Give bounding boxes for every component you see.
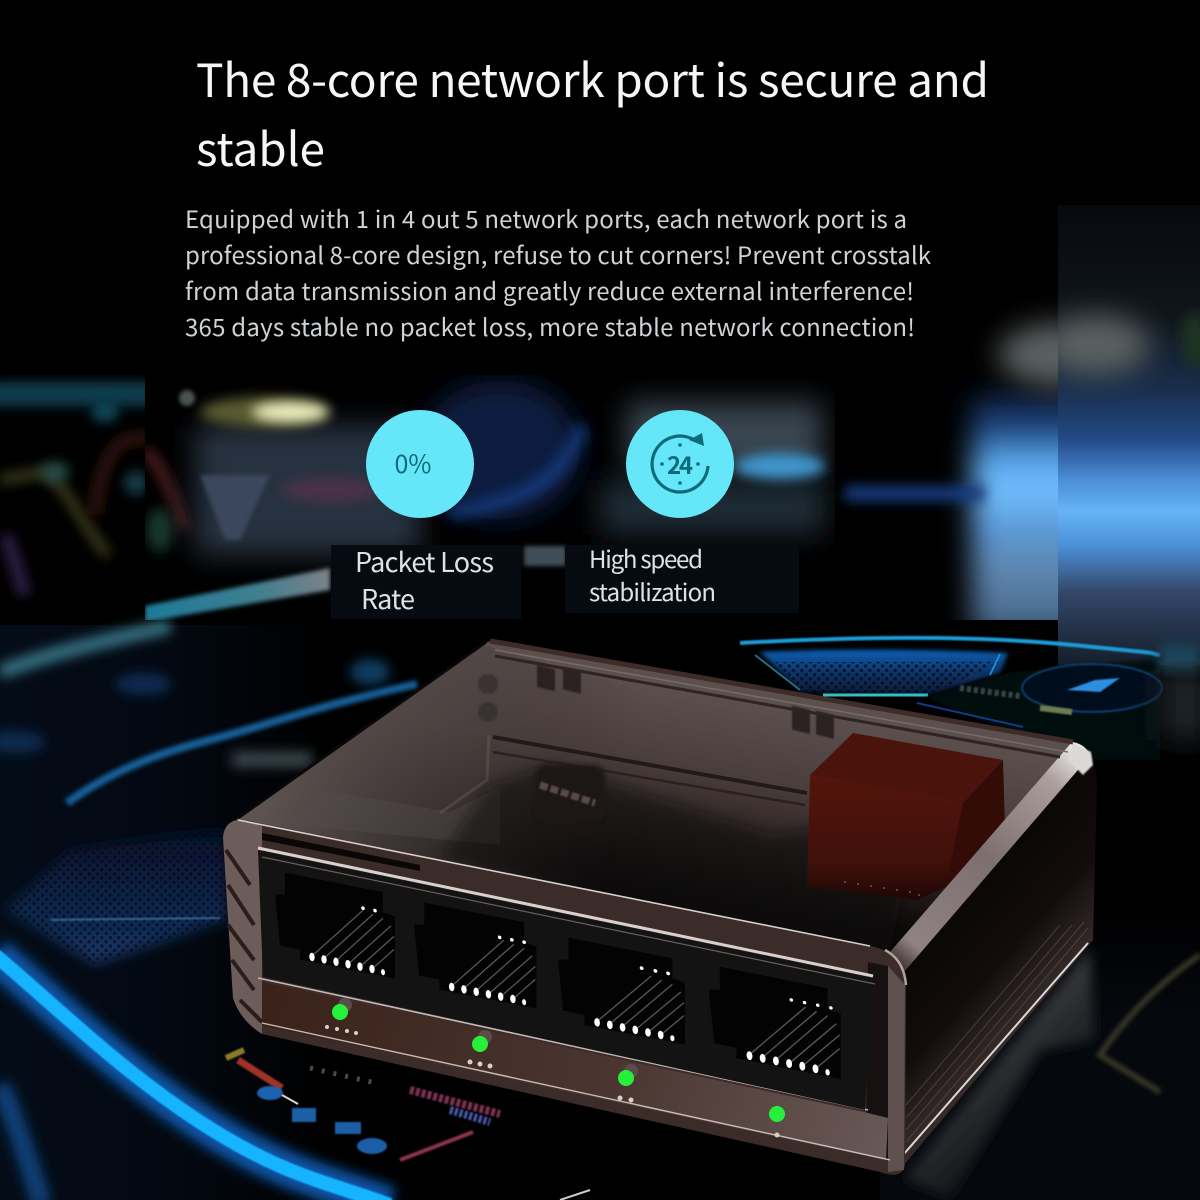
device: network switch — [223, 640, 1097, 1175]
title — [196, 45, 989, 180]
right frame — [866, 962, 888, 1160]
top rear edge — [490, 641, 1073, 742]
lower right floor — [880, 900, 1200, 1200]
icon: 24 hour badge: 24 — [667, 446, 693, 481]
LED strip — [262, 982, 888, 1160]
port 1 — [275, 871, 395, 979]
bright cyan floor arc — [0, 955, 390, 1200]
body text: from data transmission and greatly reduce external interference! — [185, 272, 914, 307]
label: packet loss rate — [331, 541, 521, 619]
port 3 — [558, 936, 685, 1045]
port 4 — [709, 965, 841, 1079]
front frame — [223, 820, 906, 1175]
icon: 0% packet loss badge — [366, 410, 474, 518]
body text: Equipped with 1 in 4 out 5 network ports, each network port is a — [185, 200, 907, 235]
body text: 365 days stable no packet loss, more stable network connection! — [185, 308, 915, 343]
central blurred screen — [145, 380, 825, 622]
port 2 — [414, 901, 536, 1009]
label: packet loss rate: Rate — [361, 578, 415, 617]
label: high speed stabilization: High speed — [589, 540, 703, 575]
glossy corner edge — [890, 742, 1090, 972]
device top face — [226, 640, 1080, 955]
red RJ45 jack inside case — [807, 733, 1005, 900]
title: stable — [196, 114, 325, 180]
far right dial — [760, 650, 1008, 696]
LED indicator dots — [325, 1025, 780, 1138]
label: packet loss rate: Packet Loss — [355, 541, 494, 580]
internal parts — [290, 665, 905, 950]
floor screen icons — [226, 1050, 244, 1058]
frame top band — [262, 833, 420, 871]
label: high speed stabilization: stabilization — [589, 573, 716, 608]
side face — [897, 748, 1097, 1165]
icon: 24 hour badge — [626, 410, 734, 518]
icon: 0% packet loss badge: 0% — [395, 445, 431, 481]
left chart screen — [0, 382, 155, 595]
label: high speed stabilization — [565, 540, 799, 613]
right hard-edged panel — [837, 305, 1058, 620]
curved lower-left streaks — [0, 626, 170, 672]
dotted mesh floor — [5, 828, 228, 965]
green status LEDs — [332, 998, 789, 1122]
title: The 8-core network port is secure and — [196, 45, 989, 111]
port panel — [258, 850, 873, 1110]
body text — [185, 200, 931, 343]
body text: professional 8-core design, refuse to cut corners! Prevent crosstalk — [185, 236, 931, 271]
